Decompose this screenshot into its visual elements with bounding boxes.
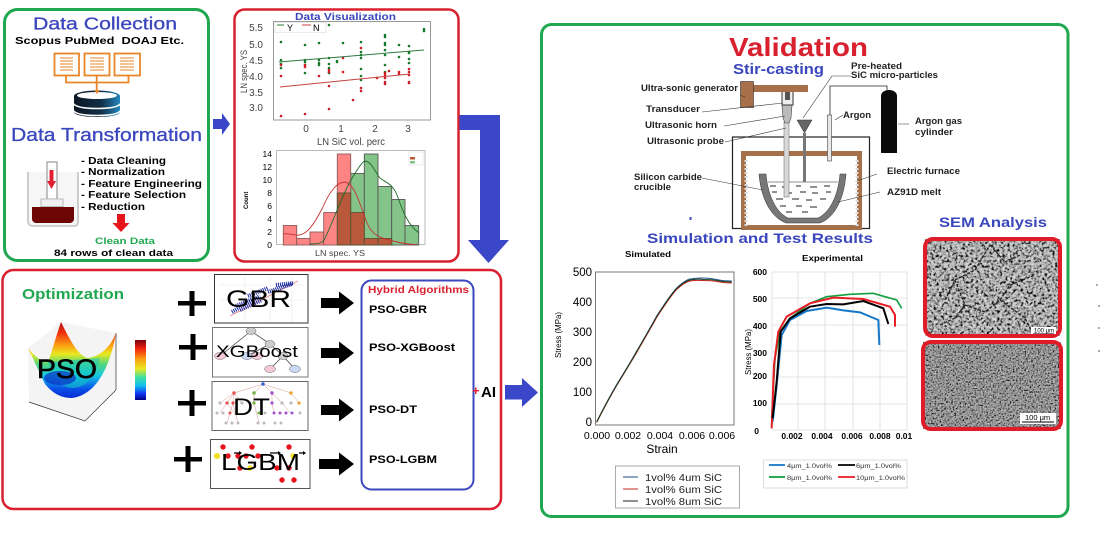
- list: hybrid algorithm names: PSO-XGBoost: [369, 342, 455, 354]
- legend: experimental curves: [764, 460, 907, 488]
- chart: scatter plot of LN spec. YS against LN SiC vol. perc: 4.0: [249, 72, 263, 83]
- diagram: stir-casting apparatus: SiC micro-particles: [851, 70, 938, 81]
- text: transformation steps: - Normalization: [81, 166, 165, 178]
- model card: DT: [212, 382, 308, 430]
- chart: simulated stress-strain curves: Strain: [646, 442, 678, 456]
- image: SEM micrograph, coarse: [925, 239, 1060, 336]
- diagram: stir-casting apparatus: Silicon carbide: [634, 172, 702, 183]
- chart: histogram of LN spec. YS by label: 6: [267, 201, 272, 211]
- icon: red down arrow: [112, 214, 130, 232]
- chart: histogram of LN spec. YS by label: 8: [267, 188, 272, 198]
- legend: experimental curves: 8μm_1.0vol%: [787, 475, 832, 482]
- diagram: stir-casting apparatus: Pre-heated: [851, 61, 902, 72]
- heading: data visualization: Data Visualization: [295, 12, 396, 23]
- chart: experimental stress-strain curves: 500: [753, 294, 767, 304]
- model card: LGBM: LGBM: [221, 449, 300, 475]
- chart: histogram of LN spec. YS by label: 12: [263, 162, 272, 172]
- arrow: optimization to validation: [505, 378, 538, 407]
- model card: DT: DT: [233, 394, 270, 421]
- arrow: GBR to PSO-GBR: [321, 292, 354, 314]
- list: hybrid algorithm names: PSO-LGBM: [369, 454, 437, 466]
- panel: data collection and transformation: [4, 10, 208, 260]
- chart: experimental stress-strain curves: 0.01: [896, 431, 913, 441]
- chart: simulated stress-strain curves: Simulated: [625, 250, 671, 259]
- chart: scatter plot of LN spec. YS against LN SiC vol. perc: 0: [303, 124, 309, 135]
- chart: scatter plot of LN spec. YS against LN SiC vol. perc: [239, 22, 430, 148]
- chart: simulated stress-strain curves: 200: [573, 357, 592, 369]
- chart: histogram of LN spec. YS by label: [244, 149, 425, 258]
- diagram: stir-casting apparatus: Electric furnace: [887, 166, 960, 177]
- chart: histogram of LN spec. YS by label: LN spec. YS: [315, 249, 365, 258]
- icon: documents feeding a database: [54, 54, 140, 117]
- model card: XGBoost: [212, 328, 308, 377]
- text: clean data: Clean Data: [95, 236, 156, 247]
- legend: experimental curves: 4μm_1.0vol%: [787, 463, 832, 470]
- chart: experimental stress-strain curves: 300: [753, 348, 767, 358]
- diagram: stir-casting apparatus: Ultrasonic probe: [647, 136, 724, 147]
- chart: scatter plot of LN spec. YS against LN SiC vol. perc: 5.0: [249, 40, 263, 51]
- chart: experimental stress-strain curves: 0.008: [869, 431, 891, 441]
- chart: experimental stress-strain curves: [743, 254, 913, 441]
- chart: experimental stress-strain curves: 100: [753, 398, 767, 408]
- chart: simulated stress-strain curves: 400: [573, 297, 592, 309]
- image: SEM micrograph, fine: [923, 342, 1061, 429]
- model card: XGBoost: XGBoost: [216, 343, 298, 361]
- chart: simulated stress-strain curves: 0.004: [647, 430, 673, 442]
- diagram: stir-casting apparatus: crucible: [634, 182, 671, 193]
- chart: histogram of LN spec. YS by label: 2: [267, 227, 272, 237]
- chart: experimental stress-strain curves: Stress (MPa): [743, 329, 753, 375]
- chart: scatter plot of LN spec. YS against LN SiC vol. perc: LN spec. YS: [239, 50, 250, 93]
- chart: simulated stress-strain curves: 0.006: [679, 430, 705, 442]
- legend: simulated curves: 1vol% 8um SiC: [645, 497, 722, 508]
- legend: simulated curves: [616, 466, 740, 508]
- list: hybrid algorithm names: [369, 304, 455, 466]
- diagram: stir-casting apparatus: Ultra-sonic generator: [641, 83, 738, 94]
- chart: scatter plot of LN spec. YS against LN SiC vol. perc: 3.0: [249, 103, 263, 114]
- diagram: stir-casting apparatus: Argon gas: [915, 116, 962, 127]
- arrow: DT to PSO-DT: [321, 398, 354, 422]
- image: SEM micrograph, fine: 100 μm: [1025, 413, 1050, 422]
- legend: simulated curves: 1vol% 4um SiC: [645, 473, 722, 484]
- chart: experimental stress-strain curves: 200: [753, 371, 767, 381]
- list: hybrid algorithm names: PSO-GBR: [369, 304, 427, 316]
- icon: data filter beaker: [28, 162, 78, 226]
- chart: simulated stress-strain curves: 500: [573, 267, 592, 279]
- chart: histogram of LN spec. YS by label: 14: [263, 149, 272, 159]
- icon: plus signs: [174, 291, 207, 472]
- chart: histogram of LN spec. YS by label: Count: [244, 192, 250, 209]
- margin marks: [1097, 284, 1100, 351]
- chart: experimental stress-strain curves: 0: [754, 426, 759, 436]
- model card: LGBM: [210, 440, 310, 488]
- chart: experimental stress-strain curves: 0.002: [781, 431, 803, 441]
- chart: simulated stress-strain curves: 0.006: [709, 430, 735, 442]
- icon: PSO surface plot: [28, 322, 116, 421]
- chart: experimental stress-strain curves: 0.006: [841, 431, 863, 441]
- heading: SEM analysis: SEM Analysis: [939, 214, 1047, 230]
- label: PSO: PSO: [37, 354, 97, 384]
- text: transformation steps: - Reduction: [81, 201, 145, 213]
- heading: data transformation: Data Transformation: [11, 124, 202, 145]
- legend: experimental curves: 6μm_1.0vol%: [856, 463, 901, 470]
- heading: data collection: Data Collection: [33, 14, 177, 34]
- chart: scatter plot of LN spec. YS against LN SiC vol. perc: 1: [338, 124, 344, 135]
- heading: optimization: Optimization: [22, 286, 124, 303]
- heading: hybrid algorithms: Hybrid Algorithms: [368, 284, 469, 296]
- chart: experimental stress-strain curves: 0.004: [811, 431, 833, 441]
- chart: simulated stress-strain curves: 0: [586, 417, 592, 429]
- text: transformation steps: - Feature Engineering: [81, 178, 202, 190]
- text: plus AI: AI: [481, 384, 496, 401]
- text: plus AI: +: [472, 383, 480, 398]
- diagram: stir-casting apparatus: cylinder: [915, 127, 953, 138]
- diagram: stir-casting apparatus: AZ91D melt: [887, 187, 942, 198]
- chart: simulated stress-strain curves: 300: [573, 327, 592, 339]
- diagram: stir-casting apparatus: Transducer: [646, 104, 700, 115]
- chart: scatter plot of LN spec. YS against LN SiC vol. perc: 3.5: [249, 88, 263, 99]
- legend: experimental curves: 10μm_1.0vol%: [856, 475, 905, 482]
- chart: simulated stress-strain curves: 100: [573, 387, 592, 399]
- model card: GBR: [214, 274, 308, 323]
- panel: validation: [542, 24, 1068, 516]
- chart: scatter plot of LN spec. YS against LN SiC vol. perc: LN SiC vol. perc: [317, 137, 385, 148]
- chart: scatter plot of LN spec. YS against LN SiC vol. perc: N: [313, 23, 320, 33]
- chart: histogram of LN spec. YS by label: 0: [267, 240, 272, 250]
- chart: scatter plot of LN spec. YS against LN SiC vol. perc: 4.5: [249, 56, 263, 67]
- diagram: stir-casting apparatus: [634, 61, 962, 228]
- chart: scatter plot of LN spec. YS against LN SiC vol. perc: 5.5: [249, 23, 263, 34]
- diagram: stir-casting apparatus: Argon: [843, 110, 871, 121]
- chart: simulated stress-strain curves: Stress (MPa): [553, 312, 563, 358]
- chart: experimental stress-strain curves: 400: [753, 321, 767, 331]
- chart: experimental stress-strain curves: 600: [753, 267, 767, 277]
- arrow: XGBoost to PSO-XGBoost: [321, 342, 354, 364]
- image: SEM micrograph, coarse: 100 μm: [1034, 328, 1054, 334]
- chart: experimental stress-strain curves: Experimental: [802, 254, 863, 263]
- chart: scatter plot of LN spec. YS against LN SiC vol. perc: Y: [287, 23, 293, 33]
- heading: validation: Validation: [729, 32, 868, 62]
- text: transformation steps: - Data Cleaning: [81, 155, 166, 167]
- arrow: visualization down to optimization: [460, 115, 509, 263]
- chart: histogram of LN spec. YS by label: 10: [263, 175, 272, 185]
- arrow: collection to visualization: [213, 113, 230, 135]
- text: transformation steps: [81, 155, 202, 213]
- chart: histogram of LN spec. YS by label: 4: [267, 214, 272, 224]
- text: transformation steps: - Feature Selection: [81, 189, 186, 201]
- arrow: LGBM to PSO-LGBM: [319, 452, 354, 476]
- heading: stir-casting: Stir-casting: [733, 61, 824, 78]
- text: data sources: Scopus PubMed DOAJ Etc.: [15, 35, 184, 47]
- model card: GBR: GBR: [226, 286, 291, 313]
- chart: simulated stress-strain curves: 0.000: [584, 430, 610, 442]
- chart: simulated stress-strain curves: [553, 250, 735, 456]
- list: hybrid algorithm names: PSO-DT: [369, 404, 417, 416]
- text: plus AI: [472, 383, 496, 401]
- panel: hybrid algorithms: [362, 280, 474, 490]
- panel: optimization: [2, 270, 501, 509]
- heading: simulation and test results: Simulation and Test Results: [647, 230, 873, 246]
- chart: scatter plot of LN spec. YS against LN SiC vol. perc: 2: [372, 124, 378, 135]
- legend: simulated curves: 1vol% 6um SiC: [645, 485, 722, 496]
- chart: scatter plot of LN spec. YS against LN SiC vol. perc: 3: [405, 124, 411, 135]
- panel: data visualization: [234, 10, 458, 262]
- chart: simulated stress-strain curves: 0.002: [615, 430, 641, 442]
- text: 84 rows of clean data: 84 rows of clean data: [54, 248, 174, 259]
- diagram: stir-casting apparatus: Ultrasonic horn: [645, 120, 717, 131]
- icon: colour scale bar: [135, 340, 146, 400]
